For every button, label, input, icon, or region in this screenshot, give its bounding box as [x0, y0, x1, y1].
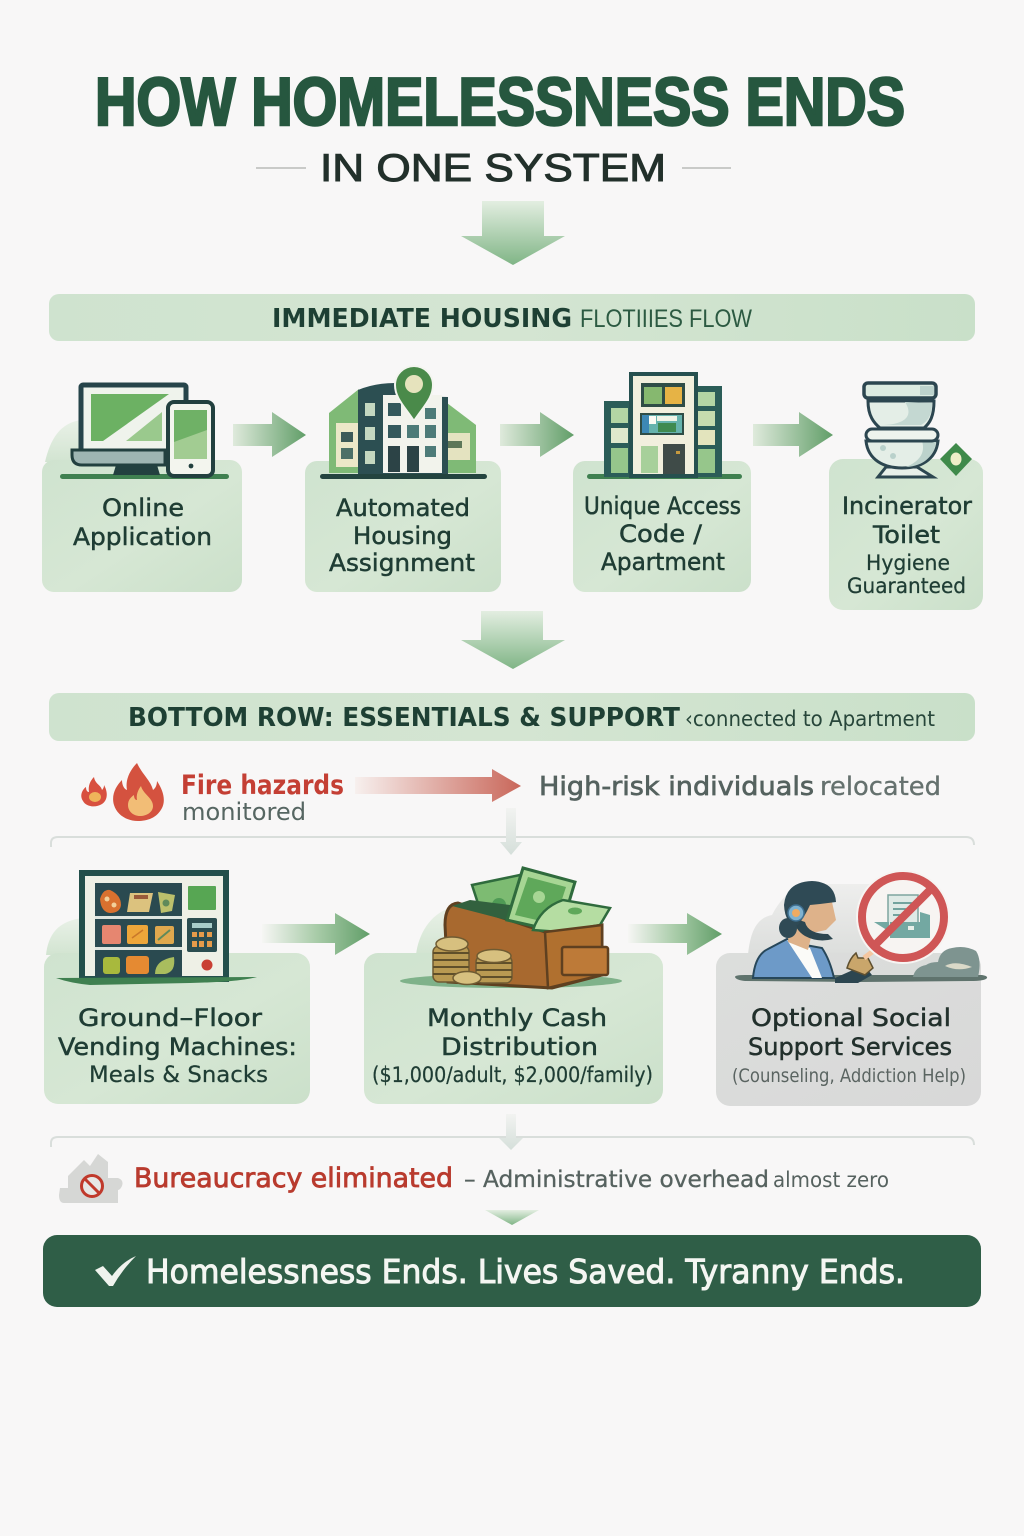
arrow: essentials down to bureaucracy	[499, 1114, 523, 1150]
text: bureaucracy eliminated	[134, 1163, 889, 1194]
banner: bottom row essentials and support: BOTTOM ROW: ESSENTIALS & SUPPORT	[128, 703, 680, 733]
icon: support worker with prohibited paperwork	[735, 870, 987, 983]
text: fire hazards monitored: Fire hazards	[181, 770, 344, 801]
label: automated housing assignment: Automated	[336, 494, 470, 522]
arrow: cash to social support	[628, 913, 722, 955]
icon: toilet	[864, 383, 972, 477]
label: incinerator toilet: Incinerator	[842, 492, 972, 520]
conclusion text: Homelessness Ends. Lives Saved. Tyranny Ends.	[146, 1252, 905, 1291]
label: automated housing assignment: Housing	[353, 522, 452, 550]
text: fire hazards monitored	[181, 770, 344, 826]
label: incinerator toilet: Toilet	[872, 521, 940, 549]
text: fire hazards monitored: monitored	[182, 798, 306, 826]
banner: conclusion	[43, 1235, 981, 1307]
label: vending machines	[58, 1004, 297, 1088]
label: monthly cash distribution: Monthly Cash	[427, 1004, 607, 1032]
label: unique access code: Apartment	[601, 548, 725, 576]
label: optional social support services: Optional Social	[751, 1004, 951, 1032]
arrow: bureaucracy to conclusion	[485, 1210, 539, 1225]
banner: bottom row essentials and support	[49, 693, 975, 741]
icon: bureaucracy crossed-out building	[59, 1154, 122, 1203]
banner: immediate housing flow	[49, 294, 975, 341]
label: online application: Application	[73, 523, 212, 551]
arrow: fire hazards to relocation	[355, 769, 521, 802]
text: high-risk individuals relocated: High-risk individuals	[539, 772, 814, 802]
label: incinerator toilet: Hygiene	[866, 551, 950, 575]
label: unique access code: Unique Access	[584, 492, 741, 520]
arrow: application to assignment	[233, 412, 306, 457]
arrow: assignment to access code	[500, 412, 574, 457]
icon: wallet with cash and coins	[400, 868, 622, 988]
panel: optional social support services	[716, 870, 987, 1106]
text: high-risk individuals relocated	[539, 772, 941, 802]
label: incinerator toilet: Guaranteed	[847, 574, 966, 598]
banner: bottom row essentials and support: ‹connected to Apartment	[685, 707, 935, 731]
label: vending machines: Ground–Floor	[78, 1004, 262, 1032]
label: online application: Online	[102, 494, 184, 522]
panel: ground-floor vending machines	[44, 873, 310, 1104]
banner: immediate housing flow: FLOTIIIES FLOW	[580, 305, 752, 333]
label: vending machines: Meals & Snacks	[89, 1063, 268, 1088]
subtitle: IN ONE SYSTEM	[320, 147, 666, 190]
panel: unique access code	[573, 374, 751, 592]
label: incinerator toilet	[842, 492, 972, 598]
icon: check mark	[95, 1256, 136, 1286]
label: unique access code	[584, 492, 741, 576]
icon: apartment with location pin	[320, 366, 487, 479]
label: unique access code: Code /	[619, 520, 703, 548]
arrow: relocation down to essentials	[500, 808, 522, 855]
arrow: title to housing flow	[461, 201, 565, 265]
panel: monthly cash distribution	[364, 868, 663, 1104]
text: high-risk individuals relocated: relocated	[820, 772, 941, 802]
icon: vending machine	[56, 873, 257, 985]
arrow: housing flow to essentials	[461, 611, 565, 669]
label: optional social support services	[732, 1004, 966, 1087]
label: monthly cash distribution	[372, 1004, 653, 1087]
label: optional social support services: (Counseling, Addiction Help)	[732, 1065, 966, 1087]
icon: fire hazards	[81, 763, 164, 821]
label: monthly cash distribution: Distribution	[441, 1033, 598, 1061]
arrow: vending to cash	[262, 913, 370, 955]
icon: laptop and tablet	[60, 385, 229, 479]
label: optional social support services: Support Services	[748, 1033, 952, 1061]
label: automated housing assignment: Assignment	[329, 549, 475, 577]
label: automated housing assignment	[329, 494, 475, 577]
label: online application	[73, 494, 212, 551]
text: bureaucracy eliminated: Bureaucracy eliminated	[134, 1163, 453, 1194]
panel: automated housing assignment	[305, 366, 501, 592]
label: vending machines: Vending Machines:	[58, 1033, 297, 1061]
arrow: access code to toilet	[753, 412, 833, 457]
label: monthly cash distribution: ($1,000/adult, $2,000/family)	[372, 1063, 653, 1087]
icon: apartment building	[587, 374, 742, 479]
panel: incinerator toilet	[829, 383, 983, 610]
banner: immediate housing flow: IMMEDIATE HOUSING	[272, 304, 572, 334]
text: bureaucracy eliminated: – Administrative overhead	[464, 1167, 769, 1193]
text: bureaucracy eliminated: almost zero	[773, 1168, 889, 1192]
panel: online application	[42, 385, 242, 592]
